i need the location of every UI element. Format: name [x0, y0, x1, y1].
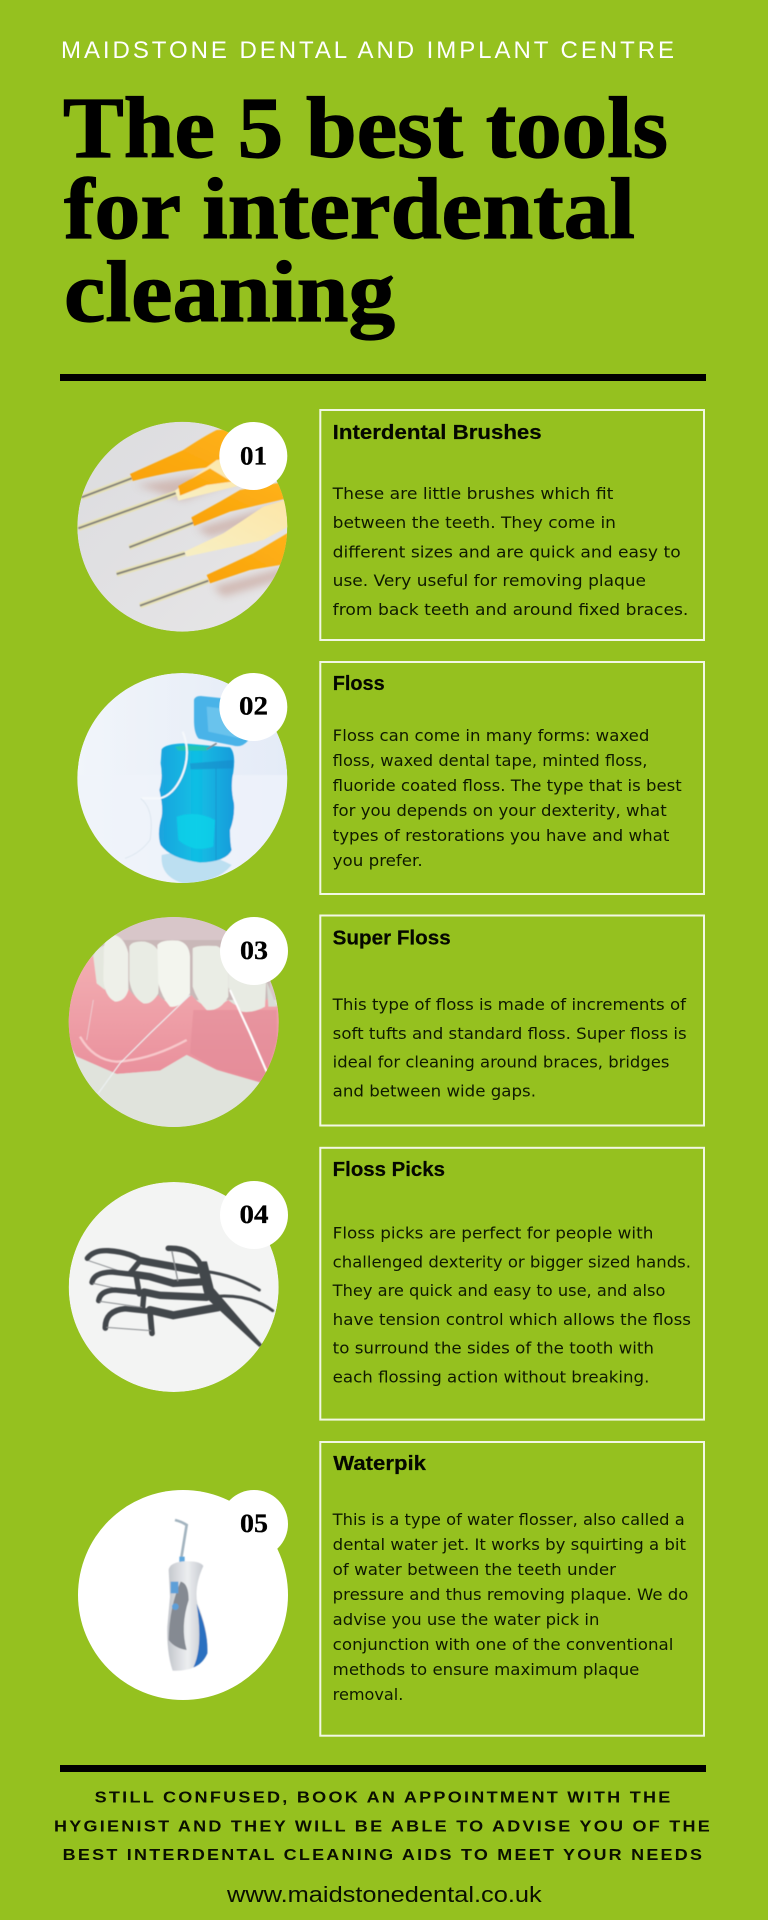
panel: floss: Floss can come in many forms: waxed — [333, 726, 649, 745]
panel: waterpik — [320, 1442, 704, 1736]
panel: waterpik: Waterpik — [333, 1453, 427, 1475]
panel: waterpik: pressure and thus removing plaque. We do — [333, 1585, 688, 1604]
panel: interdental brushes: between the teeth. They come in — [333, 513, 616, 532]
panel: floss: fluoride coated floss. The type that is best — [333, 776, 682, 795]
panel: super floss — [320, 916, 704, 1126]
number badge 01: 01 — [240, 442, 267, 470]
panel: floss picks: have tension control which allows the floss — [333, 1310, 691, 1329]
panel: floss picks: to surround the sides of the tooth with — [333, 1339, 654, 1358]
number badge 04: 04 — [240, 1200, 268, 1229]
number badge 05: 05 — [240, 1509, 268, 1538]
call to action — [54, 1790, 712, 1864]
panel: floss picks: each flossing action without breaking. — [333, 1367, 649, 1386]
image: floss picks — [69, 1182, 279, 1392]
number badge 01 — [219, 422, 287, 490]
call to action: STILL CONFUSED, BOOK AN APPOINTMENT WITH THE — [95, 1790, 673, 1807]
panel: waterpik: removal. — [333, 1685, 403, 1704]
panel: floss: Floss — [333, 673, 385, 695]
panel: waterpik: of water between the teeth under — [333, 1560, 616, 1579]
bottom divider — [60, 1765, 706, 1772]
panel: floss picks — [320, 1148, 704, 1420]
number badge 03 — [220, 917, 288, 985]
panel: waterpik: conjunction with one of the conventional — [333, 1635, 673, 1654]
panel: waterpik: dental water jet. It works by squirting a bit — [333, 1535, 686, 1554]
panel: waterpik: methods to ensure maximum plaque — [333, 1660, 639, 1679]
panel: floss — [320, 662, 704, 894]
panel: interdental brushes — [320, 410, 704, 640]
image: super floss on dental model — [67, 917, 280, 1133]
image: waterpik — [78, 1490, 288, 1700]
panel: interdental brushes: These are little brushes which fit — [332, 484, 613, 503]
panel: floss: for you depends on your dexterity, what — [333, 801, 667, 820]
number badge 05 — [220, 1490, 288, 1558]
clinic name: MAIDSTONE DENTAL AND IMPLANT CENTRE — [61, 37, 674, 64]
panel: floss picks: Floss Picks — [333, 1159, 445, 1181]
panel: interdental brushes: use. Very useful for removing plaque — [333, 571, 646, 590]
panel: super floss: soft tufts and standard floss. Super floss is — [333, 1024, 687, 1043]
image: interdental brushes — [77, 422, 290, 632]
call to action: BEST INTERDENTAL CLEANING AIDS TO MEET YOUR NEEDS — [63, 1847, 704, 1864]
call to action: HYGIENIST AND THEY WILL BE ABLE TO ADVISE YOU OF THE — [54, 1819, 712, 1836]
title — [63, 79, 668, 340]
number badge 04 — [220, 1181, 288, 1249]
panel: floss picks: challenged dexterity or bigger sized hands. — [333, 1252, 691, 1272]
panel: floss: floss, waxed dental tape, minted floss, — [333, 751, 647, 770]
panel: super floss: This type of floss is made of increments of — [332, 995, 686, 1014]
panel: interdental brushes: from back teeth and around fixed braces. — [333, 600, 688, 619]
panel: waterpik: This is a type of water flosser, also called a — [332, 1510, 685, 1529]
title: for interdental — [64, 160, 635, 257]
image: floss — [77, 673, 287, 883]
panel: interdental brushes: Interdental Brushes — [333, 422, 542, 444]
panel: floss: types of restorations you have and what — [333, 826, 669, 845]
website: www.maidstonedental.co.uk — [226, 1882, 543, 1907]
number badge 03: 03 — [240, 936, 268, 965]
panel: floss picks: They are quick and easy to use, and also — [332, 1281, 665, 1300]
top divider — [60, 374, 706, 381]
title: cleaning — [64, 243, 395, 340]
panel: waterpik: advise you use the water pick in — [333, 1610, 599, 1629]
panel: super floss: Super Floss — [333, 928, 451, 950]
panel: interdental brushes: different sizes and are quick and easy to — [333, 542, 681, 561]
panel: super floss: and between wide gaps. — [333, 1081, 536, 1100]
panel: floss: you prefer. — [333, 851, 423, 870]
number badge 02: 02 — [239, 692, 268, 720]
panel: floss picks: Floss picks are perfect for people with — [333, 1224, 653, 1243]
panel: super floss: ideal for cleaning around braces, bridges — [333, 1053, 669, 1072]
number badge 02 — [219, 673, 287, 741]
title: The 5 best tools — [63, 79, 668, 176]
